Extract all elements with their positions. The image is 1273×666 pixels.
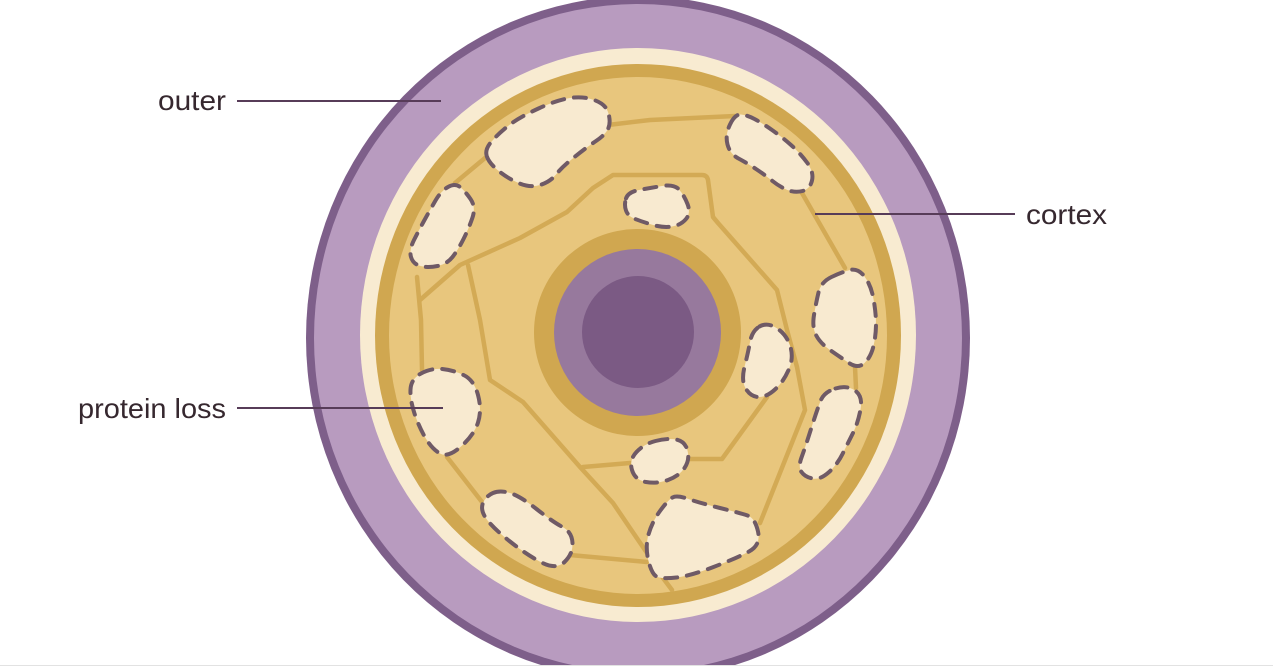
cortex layers [360, 48, 916, 622]
central hub [534, 229, 741, 436]
label: outer: outer [158, 85, 226, 116]
vein network [417, 116, 856, 590]
outer ring [306, 0, 970, 666]
protein loss patches [410, 97, 876, 578]
label: protein loss: protein loss [78, 393, 226, 424]
label: cortex: cortex [1026, 199, 1107, 230]
